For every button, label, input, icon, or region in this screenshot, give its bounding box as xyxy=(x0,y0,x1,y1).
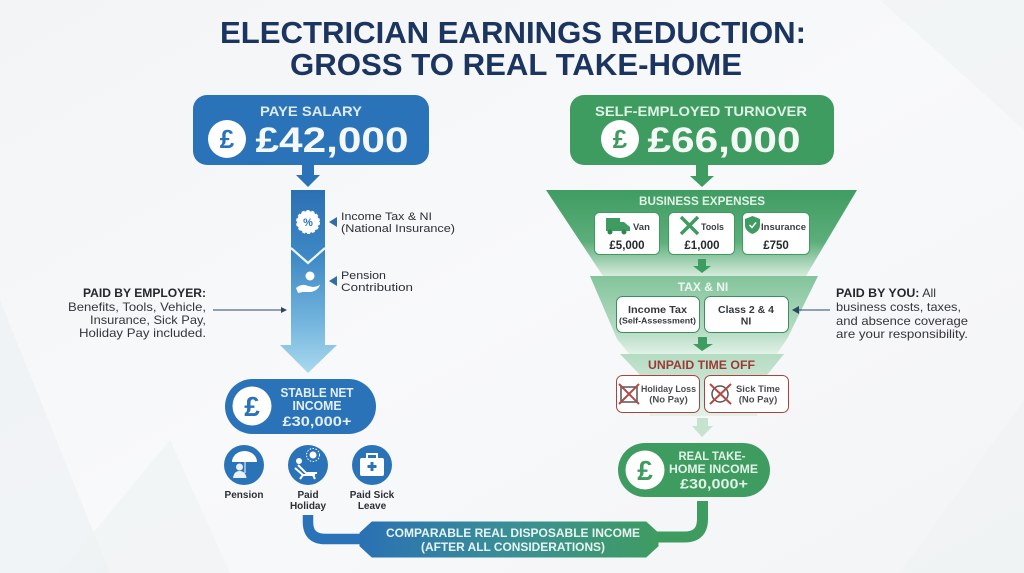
card: income tax: Income Tax xyxy=(628,304,687,316)
panel: real take-home income xyxy=(618,443,770,497)
panel: PAYE salary header: PAYE SALARY xyxy=(260,103,363,119)
card: insurance: £750 xyxy=(763,240,789,252)
card: sick time: Sick Time xyxy=(736,384,780,395)
card: sick time xyxy=(704,376,788,412)
panel: business expenses funnel xyxy=(546,190,857,276)
panel: PAYE salary header: £42,000 xyxy=(256,121,408,160)
callout: paid by employer: Holiday Pay included. xyxy=(79,326,206,340)
icon: hand with coin xyxy=(296,272,320,293)
icon: percent badge xyxy=(297,211,319,233)
deduction arrow: blue shaft xyxy=(280,190,337,373)
panel: unpaid time off funnel xyxy=(616,354,788,416)
icon: paid holiday: Holiday xyxy=(290,501,326,512)
card: van: £5,000 xyxy=(609,240,645,252)
callout: paid by employer: PAID BY EMPLOYER: xyxy=(83,286,206,300)
panel: real take-home income: REAL TAKE- xyxy=(678,449,746,463)
card: sick time: (No Pay) xyxy=(739,394,777,406)
callout: paid by you: are your responsibility. xyxy=(836,327,968,341)
banner: comparable disposable income: COMPARABLE REAL DISPOSABLE INCOME xyxy=(386,528,640,540)
arrow: PAYE header to deductions xyxy=(296,165,320,187)
label: pension contribution: Contribution xyxy=(341,282,413,294)
icon: paid holiday xyxy=(288,445,328,512)
panel: unpaid time off funnel: UNPAID TIME OFF xyxy=(648,358,755,372)
arrow: employer callout to shaft xyxy=(213,307,287,313)
panel: business expenses funnel: BUSINESS EXPENSES xyxy=(639,194,765,208)
card: van: Van xyxy=(633,222,650,233)
label: income tax and NI xyxy=(329,211,455,235)
banner: comparable disposable income: (AFTER ALL CONSIDERATIONS) xyxy=(421,542,605,554)
panel: PAYE salary header xyxy=(193,95,429,165)
label: income tax and NI: Income Tax & NI xyxy=(341,211,432,223)
panel: real take-home income: £ xyxy=(637,455,653,486)
icon: percent badge: % xyxy=(303,217,313,229)
callout: paid by employer xyxy=(68,286,206,340)
panel: stable net income xyxy=(225,379,376,434)
card: van xyxy=(594,212,660,254)
label: income tax and NI: (National Insurance) xyxy=(341,223,455,235)
panel: stable net income: £30,000+ xyxy=(282,413,352,429)
card: income tax: (Self-Assessment) xyxy=(619,316,696,326)
panel: tax and NI funnel: TAX & NI xyxy=(678,280,728,294)
panel: self-employed header: £ xyxy=(613,124,628,154)
arrow: expenses to tax xyxy=(693,259,711,273)
label: pension contribution: Pension xyxy=(341,270,386,282)
panel: stable net income: INCOME xyxy=(292,399,342,413)
panel: self-employed header: SELF-EMPLOYED TURNOVER xyxy=(595,103,807,119)
panel: self-employed header xyxy=(570,95,834,165)
card: income tax xyxy=(616,296,700,332)
arrow: turnover to expenses xyxy=(690,165,714,187)
panel: stable net income: STABLE NET xyxy=(280,386,354,400)
card: insurance xyxy=(742,212,810,254)
card: class 2 and 4 NI xyxy=(704,296,788,332)
banner: comparable disposable income xyxy=(360,522,658,557)
panel: self-employed header: £66,000 xyxy=(648,121,800,160)
connector: green xyxy=(644,501,702,537)
card: holiday loss: Holiday Loss xyxy=(641,384,696,395)
icon: pension xyxy=(224,445,264,501)
icon: paid holiday: Paid xyxy=(297,490,319,501)
label: pension contribution xyxy=(329,270,413,294)
card: tools xyxy=(668,212,734,254)
panel: PAYE salary header: £ xyxy=(220,124,235,154)
card: holiday loss xyxy=(616,376,700,412)
panel: real take-home income: £30,000+ xyxy=(680,476,748,492)
icon: paid sick leave: Leave xyxy=(358,501,387,512)
callout: paid by employer: Insurance, Sick Pay, xyxy=(90,313,206,327)
title: GROSS TO REAL TAKE-HOME xyxy=(290,47,742,82)
card: holiday loss: (No Pay) xyxy=(649,394,688,406)
callout: paid by you: business costs, taxes, xyxy=(836,300,961,314)
callout: paid by you xyxy=(836,286,968,341)
panel: stable net income: £ xyxy=(244,391,260,422)
panel: real take-home income: HOME INCOME xyxy=(669,462,758,476)
arrow: tax to unpaid time xyxy=(693,337,713,351)
arrow: unpaid time to take-home xyxy=(692,418,713,437)
card: class 2 and 4 NI: NI xyxy=(741,316,751,328)
icon: pension: Pension xyxy=(225,490,263,501)
callout: paid by you: PAID BY YOU: All xyxy=(836,286,936,300)
title xyxy=(220,15,806,82)
connector: blue xyxy=(308,515,373,539)
arrow: paid by you to tax xyxy=(792,306,830,314)
icon: paid sick leave xyxy=(350,445,395,512)
callout: paid by employer: Benefits, Tools, Vehicle, xyxy=(68,300,206,314)
card: class 2 and 4 NI: Class 2 & 4 xyxy=(718,304,774,316)
title: ELECTRICIAN EARNINGS REDUCTION: xyxy=(220,15,806,50)
card: insurance: Insurance xyxy=(761,222,806,233)
panel: tax and NI funnel xyxy=(590,276,818,355)
card: tools: £1,000 xyxy=(684,240,720,252)
icon: paid sick leave: Paid Sick xyxy=(350,490,395,501)
callout: paid by you: and absence coverage xyxy=(836,314,968,328)
card: tools: Tools xyxy=(701,222,724,233)
